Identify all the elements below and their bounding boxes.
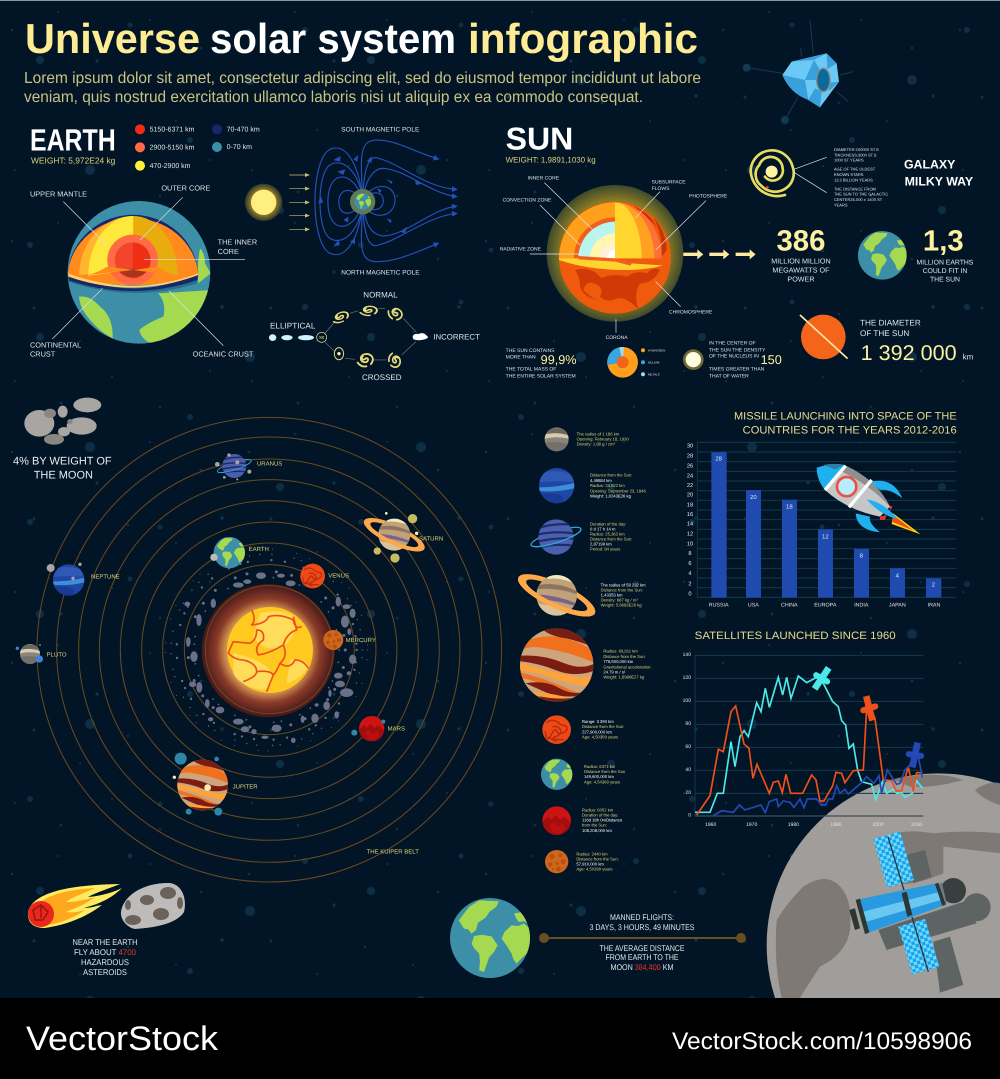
stat: earths in sun: THE SUN (930, 276, 960, 283)
stat: nucleus density (709, 340, 782, 379)
bar chart: missile launches: 26 (687, 463, 693, 469)
jupiter fact: Radius: 69,911 km (603, 649, 638, 654)
bar chart: missile launches: CHINA (781, 602, 798, 608)
stat: mass of solar system: THE TOTAL MASS OF (506, 366, 556, 372)
bar chart: missile launches: RUSSIA (709, 602, 729, 608)
icon: space station (849, 832, 991, 993)
heading: missile launching chart: COUNTRIES FOR THE YEARS 2012-2016 (743, 424, 957, 436)
line chart: satellites launched: 0 (688, 812, 691, 818)
line chart: satellites launched (683, 652, 926, 827)
earth labels: UPPER MANTLE (30, 190, 87, 198)
galaxy facts: THE SUN TO THE GALACTIC (834, 192, 888, 197)
planet: mercury (323, 630, 343, 650)
planet: earth (210, 537, 246, 568)
venus fact: Duration of the day: (582, 813, 618, 818)
stat: earths in sun: COULD FIT IN (923, 267, 967, 275)
stat: earths in sun: 1,3 (923, 224, 964, 257)
sun weight: WEIGHT: 1,9891,1030 kg (506, 155, 596, 164)
saturn fact: Weight: 5,6683E26 kg (601, 603, 642, 608)
panel: planet fact column lower (541, 715, 625, 873)
earth labels (30, 184, 257, 358)
stat: mass of solar system: THE SUN CONTAINS (506, 348, 554, 353)
line chart: satellites launched: 80 (685, 721, 691, 726)
galaxy facts: KNOWN STARS (834, 172, 863, 177)
earth fact: Age: 4,54369 years (584, 780, 620, 784)
diameter text: THE DIAMETER (860, 319, 921, 328)
title: infographic (468, 15, 698, 62)
sun labels: CONVECTION ZONE (503, 197, 551, 203)
pluto fact: Opening: February 18, 1930 (577, 437, 629, 442)
stat: power: 386 (776, 224, 825, 257)
stat: power: MEGAWATTS OF (772, 266, 829, 274)
earth labels: CONTINENTAL (30, 341, 81, 349)
saturn fact: Distance from the Sun: (601, 588, 643, 592)
line chart: satellites launched: 140 (683, 652, 691, 657)
bar chart: missile launches: 10 (687, 540, 693, 547)
planet labels: VENUS (328, 572, 349, 579)
stat: nucleus density: THAT OF WATER (709, 373, 749, 379)
jupiter fact: 24.79 m / s² (603, 670, 625, 674)
earth labels: OCEANIC CRUST (193, 350, 253, 358)
bar chart: missile launches: 2 (932, 581, 935, 588)
planet labels: EARTH (249, 546, 269, 552)
asteroid text: NEAR THE EARTH (72, 937, 138, 947)
panel: solar system (13, 398, 502, 882)
asteroid belt (166, 549, 368, 751)
stat: nucleus density: IN THE CENTER OF (709, 340, 756, 346)
subtitle text: Lorem ipsum dolor sit amet, consectetur adipiscing elit, sed do eiusmod tempor incididunt ut labore (24, 70, 701, 87)
asteroid text: HAZARDOUS (81, 957, 129, 967)
moon fragments icon (24, 398, 101, 445)
earth labels: CRUST (30, 350, 55, 358)
diameter text (860, 319, 973, 365)
bar chart: missile launches: 16 (687, 511, 693, 517)
saturn fact: 1,43353 km (601, 593, 622, 597)
moon weight text: 4% BY WEIGHT OF (13, 454, 112, 467)
stat: earths in sun: MILLION EARTHS (917, 258, 973, 266)
heading: missile launching chart: MISSILE LAUNCHING INTO SPACE OF THE (734, 410, 957, 422)
earth weight: WEIGHT: 5,972E24 kg (31, 155, 115, 165)
bar chart: missile launches: 6 (688, 560, 692, 566)
mercury fact: Distance from the Sun: (576, 857, 619, 862)
venus fact: 108,208,000 km (582, 828, 612, 833)
line chart: satellites launched: 1990 (830, 822, 842, 827)
magnetic poles labels: NORTH MAGNETIC POLE (341, 269, 420, 276)
magnetic poles labels (341, 126, 420, 276)
neptune fact: Opening: September 23, 1846 (590, 489, 646, 493)
footer band: VectorStock.com/10598906 (672, 1028, 972, 1055)
line chart: satellites launched: 2000 (872, 822, 884, 827)
mercury fact: Age: 4,50369 years (576, 867, 612, 872)
uranus fact: Radius: 25,362 km (590, 532, 625, 537)
planet labels: URANUS (257, 460, 282, 467)
heading: satellites chart: SATELLITES LAUNCHED SINCE 1960 (695, 630, 896, 642)
legend: earth layers: 5150-6371 km (150, 125, 194, 133)
sun labels: CHROMOSPHERE (669, 309, 712, 315)
distance text: MANNED FLIGHTS: (610, 912, 674, 922)
icon: blue satellite (904, 741, 926, 769)
sun labels: RADIATIVE ZONE (500, 246, 541, 252)
bar chart: missile launches: USA (748, 602, 759, 608)
line chart: satellites launched: 20 (685, 790, 691, 795)
line chart: satellites launched: 120 (683, 675, 691, 680)
stat: mass of solar system: MORE THAN (506, 354, 536, 360)
stat: mass of solar system: 99,9% (541, 353, 577, 367)
icon: sun diameter (800, 315, 848, 359)
planet: pluto (16, 644, 43, 664)
icon: satellite top right (743, 20, 853, 124)
bar chart: missile launches: IRAN (928, 602, 940, 608)
galaxy facts: YEARS (834, 203, 848, 207)
bar chart: missile launches: 2 (688, 581, 692, 587)
jupiter fact: Weight: 1,8986E27 kg (603, 675, 644, 679)
planet labels: MARS (388, 725, 405, 732)
saturn fact (513, 566, 646, 625)
bar chart: missile launches: 4 (688, 570, 692, 576)
icon: earth (858, 231, 908, 280)
stat: nucleus density: OF THE NUCLEUS IN (709, 353, 759, 359)
moon weight text: THE MOON (34, 469, 93, 481)
galaxy facts: THICKNESS:3000 ST.S (834, 153, 876, 157)
stat: power (771, 224, 831, 283)
galaxy classification diagram: S0 (319, 335, 324, 340)
icon: comet (28, 884, 122, 928)
asteroid text: FLY ABOUT 4700 (74, 947, 136, 957)
sun labels: PHOTOSPHERE (689, 193, 727, 199)
mercury fact: Radius: 2440 km (576, 852, 608, 856)
bar chart: missile launches: 30 (687, 442, 693, 449)
bar chart: missile launches: 28 (687, 453, 693, 459)
diameter text: km (963, 352, 973, 361)
planet: saturn (360, 512, 429, 563)
galaxy milky way heading (904, 158, 973, 188)
galaxy facts: 13.2 BILLION YEARS (834, 178, 873, 182)
icon: cyan satellite (807, 663, 836, 694)
panel: planet fact column upper (513, 427, 651, 703)
line chart: satellites launched: 1960 (705, 822, 716, 827)
saturn fact: Density: 687 kg / m³ (601, 598, 638, 603)
planet labels: SATURN (419, 535, 443, 542)
planet labels (47, 460, 443, 855)
stat: mass of solar system (506, 348, 577, 379)
mars fact: Age: 4,50309 years (582, 735, 618, 739)
neptune fact: Weight: 1,0243E26 kg (590, 494, 631, 498)
title: Universe (25, 15, 200, 62)
mercury fact (545, 850, 619, 873)
venus fact (542, 806, 622, 835)
jupiter fact (518, 626, 651, 703)
magnetic poles labels: SOUTH MAGNETIC POLE (341, 126, 419, 133)
moon weight text (13, 454, 112, 481)
neptune fact: Radius: 24,622 km (590, 483, 625, 488)
sun labels: SUBSURFACE (652, 179, 686, 185)
stat: earths in sun (917, 224, 973, 283)
earth fact (541, 759, 625, 790)
sun labels: CORONA (606, 335, 628, 340)
distance text: THE AVERAGE DISTANCE (600, 943, 685, 953)
diameter text: OF THE SUN (860, 329, 909, 338)
bar chart: missile launches: 8 (860, 552, 863, 559)
galaxy classification diagram: CROSSED (362, 373, 402, 382)
icon: nucleus (683, 349, 704, 370)
distance text (590, 912, 695, 972)
bar chart: missile launches: 12 (822, 533, 829, 540)
planet labels: MERCURY (346, 637, 376, 643)
planet labels: PLUTO (47, 651, 67, 658)
planet: neptune (47, 563, 84, 597)
diameter text: 1 392 000 (861, 341, 957, 365)
galaxy facts: AGE OF THE OLDEST (834, 167, 875, 172)
legend: earth layers: 470-2900 km (150, 162, 191, 170)
mercury fact: 57,910,000 km (576, 862, 604, 867)
bar chart: missile launches: JAPAN (889, 602, 906, 608)
line chart: satellites launched: 100 (683, 698, 691, 703)
mars fact (542, 715, 624, 744)
bar chart: missile launches: 14 (687, 521, 693, 527)
line chart: satellites launched: 2010 (911, 822, 922, 827)
line chart: satellites launched: 1980 (788, 822, 799, 827)
bar chart: missile launches: 18 (687, 501, 693, 508)
icon: sun and solar wind arrows (245, 173, 310, 231)
heading: missile launching chart (734, 410, 957, 436)
footer band (0, 998, 1000, 1079)
neptune fact (539, 468, 646, 505)
panel: sun section (500, 121, 973, 379)
pie chart: composition: HYDROGEN (648, 349, 665, 352)
icon: spiral galaxy (751, 150, 827, 196)
bar chart: missile launches: 20 (687, 492, 693, 498)
planet labels: JUPITER (233, 783, 258, 790)
asteroid text (72, 937, 138, 977)
icon: rocket (817, 464, 921, 534)
mars fact: Distance from the Sun: (582, 724, 624, 729)
icon: earth and moon distance (450, 898, 746, 978)
arrows (683, 249, 756, 259)
galaxy classification diagram (269, 290, 480, 382)
legend: earth layers (135, 124, 260, 171)
sun labels (500, 175, 727, 340)
bar chart: missile launches: 28 (715, 455, 722, 462)
bar chart: missile launches: 24 (687, 472, 693, 479)
legend: earth layers: 0-70 km (227, 143, 252, 151)
galaxy facts: DIAMETER:100000 ST.S (834, 147, 879, 152)
galaxy milky way heading: MILKY WAY (905, 175, 973, 188)
pluto fact (545, 427, 629, 451)
neptune fact: 4,49884 km (590, 478, 612, 483)
pie chart: composition (607, 347, 665, 378)
line chart: satellites launched: 1970 (746, 822, 757, 827)
galaxy milky way heading: GALAXY (904, 158, 955, 171)
stat: nucleus density: THE SUN THE DENSITY (709, 347, 765, 353)
stat: power: POWER (787, 275, 815, 283)
earth cross-section (68, 201, 213, 345)
galaxy classification diagram: ELLIPTICAL (270, 322, 315, 331)
planet labels: NEPTUNE (91, 573, 120, 580)
planet: jupiter (173, 753, 231, 816)
distance text: 3 DAYS, 3 HOURS, 49 MINUTES (590, 922, 695, 932)
bar chart: missile launches: 12 (687, 530, 693, 537)
venus fact: Radius: 6052 km (582, 808, 613, 812)
uranus fact: 2,87199 km (590, 542, 612, 547)
mars fact: 227,900,000 km (582, 730, 612, 734)
icon: moon surface (766, 773, 1000, 998)
bar chart: missile launches: INDIA (854, 602, 869, 608)
galaxy facts: THE DISTANCE FROM (834, 187, 876, 191)
galaxy classification diagram: INCORRECT (433, 332, 480, 341)
earth fact: Distance from the Sun (584, 769, 625, 774)
stat: nucleus density: TIMES GREATER THAN (709, 366, 764, 372)
legend: earth layers: 2900-5150 km (150, 143, 194, 151)
neptune fact: Distance from the Sun: (590, 473, 632, 478)
pie chart: composition: HELIUM (648, 361, 659, 364)
heading: earth: EARTH (30, 123, 116, 157)
mars fact: Range: 3 390 km (582, 719, 614, 724)
planet labels: THE KUIPER BELT (367, 848, 419, 855)
galaxy facts (834, 147, 888, 207)
pluto fact: Density: 1.88 g / cm³ (577, 442, 615, 447)
heading: sun: SUN (506, 121, 573, 156)
earth labels: THE INNER (218, 238, 257, 246)
title: solar system (210, 15, 456, 62)
bar chart: missile launches: 18 (786, 503, 793, 510)
earth fact: 149,600,000 km (584, 774, 614, 779)
subtitle text: veniam, quis nostrud exercitation ullamco laboris nisi ut aliquip ex ea commodo consequat. (24, 89, 643, 106)
bar chart: missile launches: 8 (688, 550, 692, 556)
stat: mass of solar system: THE ENTIRE SOLAR SYSTEM (506, 373, 576, 379)
icon: orange satellite (856, 693, 882, 723)
earth labels: CORE (218, 247, 239, 256)
uranus fact (529, 519, 632, 555)
legend: earth layers: 70-470 km (227, 125, 260, 133)
jupiter fact: Gravitational acceleration: (603, 665, 651, 669)
sun cross-section (547, 185, 683, 322)
icon: asteroid (121, 883, 185, 929)
planet: uranus (215, 453, 252, 480)
magnetic field diagram (315, 140, 457, 262)
bar chart: missile launches: 4 (896, 572, 899, 579)
venus fact: 116d 18h 0mDistance (582, 818, 622, 823)
bar chart: missile launches: EUROPA (814, 602, 836, 608)
galaxy classification diagram: NORMAL (363, 290, 398, 299)
sun labels: INNER CORE (528, 175, 559, 181)
uranus fact: 0 d 17 h 14 m (590, 527, 615, 531)
stat: power: MILLION MILLION (771, 257, 831, 265)
bar chart: missile launches: 22 (687, 482, 693, 488)
pie chart: composition: METALS (648, 373, 660, 376)
line chart: satellites launched: 40 (685, 767, 691, 772)
planet: venus (300, 564, 325, 588)
planet: mars (351, 716, 385, 741)
sun (202, 584, 335, 717)
galaxy facts: 1000 ST YEARS (834, 158, 864, 163)
leader lines (530, 183, 706, 333)
jupiter fact: Distance from the Sun: (603, 654, 646, 659)
pluto fact: The radius of 1 186 km (577, 432, 619, 437)
galaxy facts: CENTER26,000 ± 1400 ST (834, 197, 882, 202)
stat: nucleus density: 150 (761, 353, 782, 367)
bar chart: missile launches: 0 (688, 591, 692, 597)
footer band: VectorStock (26, 1020, 219, 1058)
sun labels: FLOWS (652, 186, 669, 191)
uranus fact: Period: 84 years (590, 547, 620, 552)
asteroid text: ASTEROIDS (83, 967, 127, 977)
jupiter fact: 778,500,000 km (603, 659, 633, 664)
bar chart: missile launches (687, 442, 957, 608)
leader lines (52, 197, 245, 346)
venus fact: from the Sun: (582, 823, 607, 828)
distance text: MOON 384,400 KM (610, 962, 674, 972)
line chart: satellites launched: 60 (685, 744, 691, 749)
uranus fact: Distance from the Sun: (590, 537, 632, 542)
panel: earth section (30, 123, 480, 382)
bar chart: missile launches: 20 (750, 494, 757, 500)
saturn fact: The radius of 58 232 km (601, 583, 646, 587)
distance text: FROM EARTH TO THE (606, 952, 679, 962)
uranus fact: Duration of the day: (590, 522, 626, 526)
earth fact: Radius: 6371 km (584, 764, 615, 769)
earth labels: OUTER CORE (161, 184, 210, 192)
orbits (37, 417, 502, 882)
